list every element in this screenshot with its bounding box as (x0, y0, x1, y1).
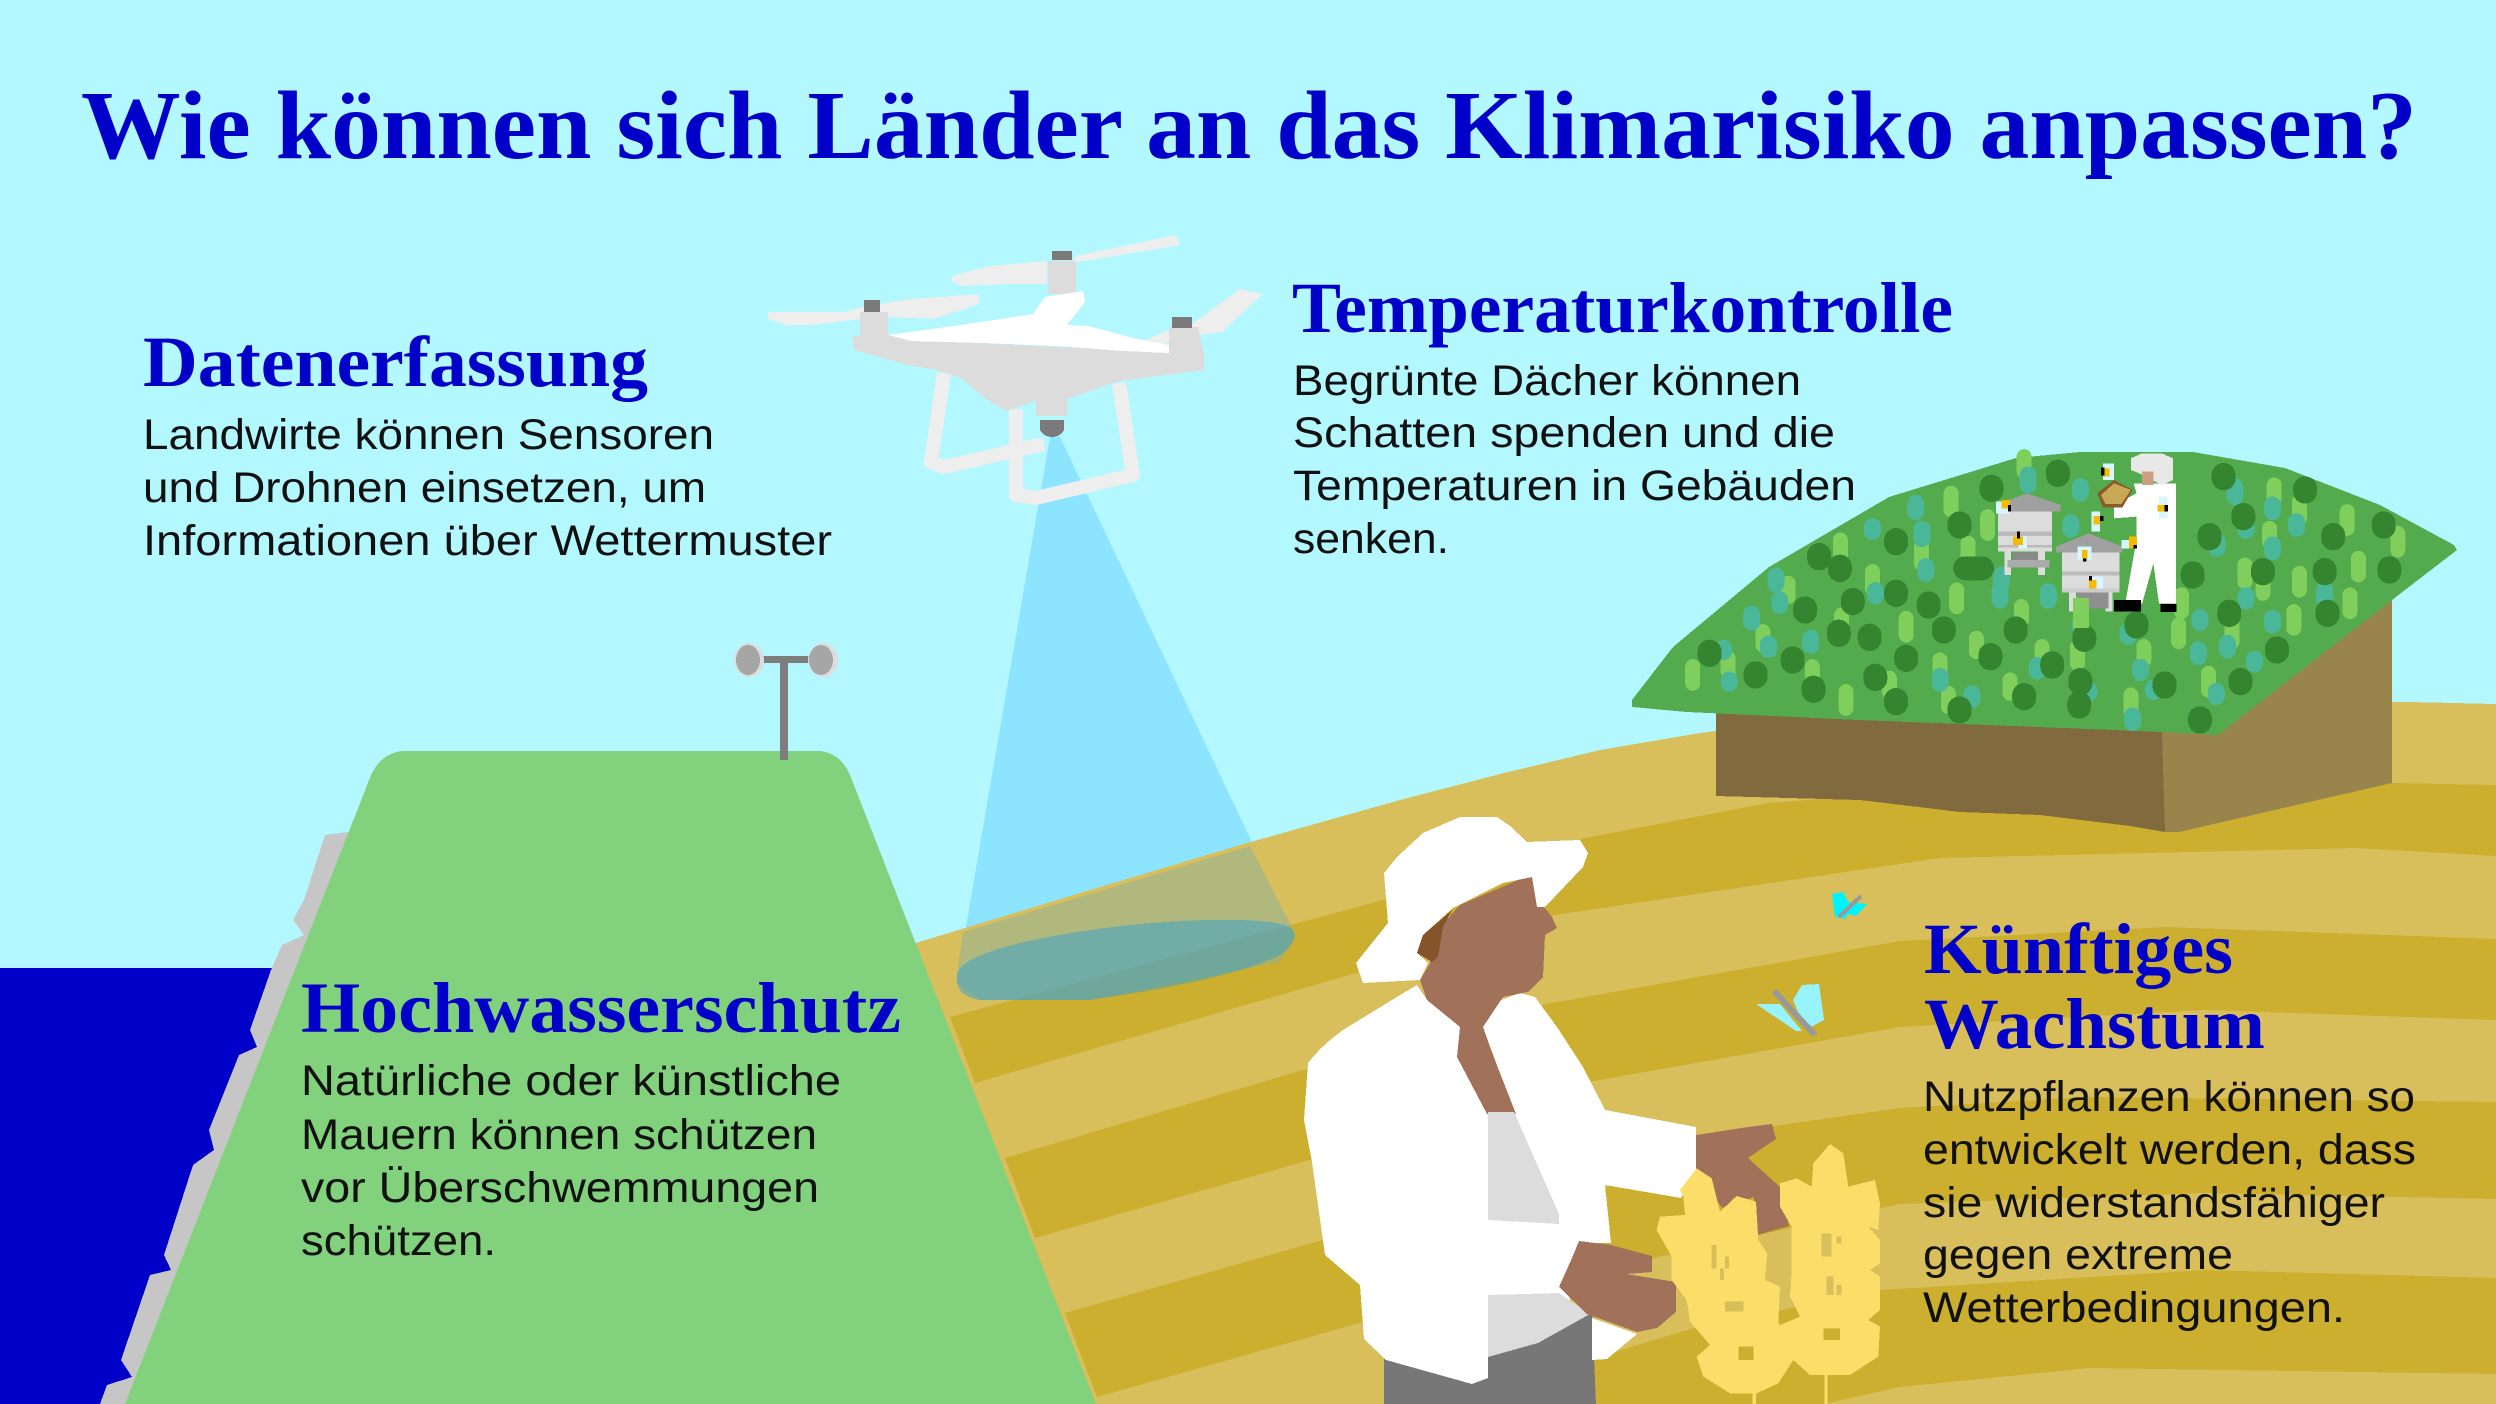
seawall dike (125, 751, 1096, 1404)
text block: Datenerfassung: Landwirte können Sensoren (143, 411, 714, 459)
sea water (0, 968, 320, 1404)
scanned ellipse on the ground (957, 920, 1294, 1000)
heading: Künftiges Wachstum: Wachstum (1924, 984, 2265, 1064)
drone (768, 235, 1263, 498)
farmer trousers (1384, 1310, 1596, 1404)
farmer hat (1356, 817, 1588, 983)
beehive one (1996, 493, 2061, 575)
weather sensor on dike (734, 643, 838, 760)
panel: Künftiges Wachstum (1923, 909, 2416, 1332)
heading: Hochwasserschutz: Hochwasserschutz (301, 968, 901, 1048)
text block: Datenerfassung: und Drohnen einsetzen, um (143, 464, 706, 512)
text block: Künftiges Wachstum: Nutzpflanzen können so (1923, 1073, 2415, 1121)
text block: Hochwasserschutz: Natürliche oder künstliche (301, 1057, 841, 1105)
beehives (1996, 493, 2122, 612)
text block: Künftiges Wachstum: Wetterbedingungen. (1923, 1284, 2345, 1332)
front wall (1716, 712, 2165, 832)
text block: Künftiges Wachstum (1923, 1073, 2416, 1332)
text block: Hochwasserschutz: schützen. (301, 1217, 496, 1265)
panel: Temperaturkontrolle (1292, 268, 1953, 563)
title: Wie können sich Länder an das Klimarisiko anpassen? (81, 72, 2417, 180)
heading: Künftiges Wachstum (1924, 909, 2265, 1064)
panel: Hochwasserschutz (301, 968, 901, 1265)
heading: Datenerfassung: Datenerfassung (143, 322, 648, 402)
farmer shirt (1304, 985, 1696, 1384)
butterfly pale blue (1756, 984, 1824, 1035)
text block: Künftiges Wachstum: sie widerstandsfähiger (1923, 1179, 2385, 1227)
heading: Künftiges Wachstum: Künftiges (1924, 909, 2233, 989)
beekeeper (2097, 453, 2176, 612)
text block: Temperaturkontrolle: Schatten spenden und die (1293, 409, 1835, 457)
text block: Temperaturkontrolle (1293, 357, 1856, 563)
drone landing gear (931, 373, 1133, 498)
farmer undershirt (1488, 1112, 1590, 1357)
drone propellers (768, 235, 1263, 352)
farm field (880, 702, 2496, 1404)
text block: Hochwasserschutz: vor Überschwemmungen (301, 1164, 819, 1212)
rocks on the seawall (100, 832, 400, 1404)
side wall (2162, 600, 2392, 832)
farmer hands (1559, 1124, 1789, 1332)
text block: Temperaturkontrolle: Temperaturen in Gebäuden (1293, 462, 1856, 510)
text block: Datenerfassung: Informationen über Wettermuster (143, 517, 832, 565)
wheat plants (1657, 1144, 1880, 1404)
plant in front of hive (2073, 598, 2089, 628)
panel: Datenerfassung (143, 322, 832, 565)
drone body (852, 261, 1204, 416)
farmer (1304, 817, 1880, 1404)
beehive two (2056, 533, 2122, 612)
text block: Künftiges Wachstum: entwickelt werden, dass (1923, 1126, 2416, 1174)
text block: Hochwasserschutz (301, 1057, 841, 1265)
farmer hair (1417, 877, 1543, 962)
text block: Datenerfassung (143, 411, 832, 565)
text block: Künftiges Wachstum: gegen extreme (1923, 1231, 2233, 1279)
text block: Temperaturkontrolle: Begrünte Dächer können (1293, 357, 1801, 405)
drone top shell (888, 291, 1169, 353)
butterfly cyan (1832, 892, 1867, 919)
beam footprint over the field (956, 846, 1296, 1000)
bees (1996, 463, 2168, 588)
drone motor caps and camera (864, 251, 1192, 437)
text block: Hochwasserschutz: Mauern können schützen (301, 1111, 817, 1159)
heading: Temperaturkontrolle: Temperaturkontrolle (1292, 268, 1953, 348)
roof plants (1693, 457, 2398, 723)
farmer face and neck (1420, 877, 1557, 1114)
text block: Temperaturkontrolle: senken. (1293, 515, 1449, 563)
green roof (1632, 452, 2457, 735)
green roof house (1632, 452, 2457, 832)
drone light beam (956, 437, 1296, 985)
